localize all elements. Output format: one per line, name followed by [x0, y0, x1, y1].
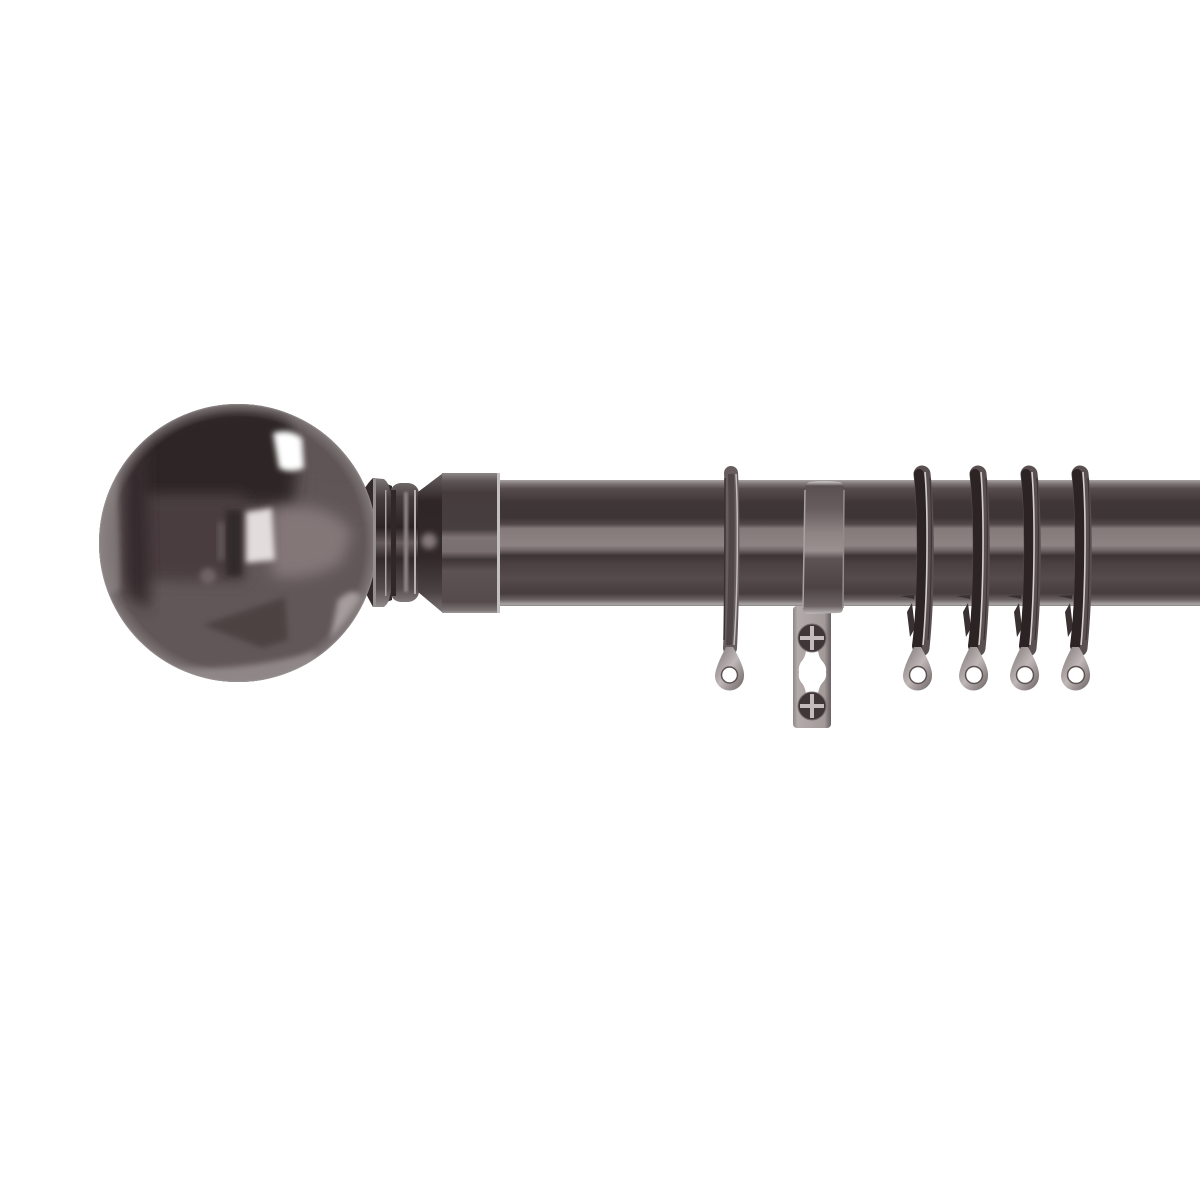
ball finial [99, 404, 373, 682]
ring shadow and hook strand [1058, 595, 1073, 637]
icon: lower screw [798, 692, 826, 720]
finial cone [418, 473, 443, 613]
icon: upper screw [798, 624, 826, 652]
ring band [1028, 474, 1032, 648]
curtain ring 2 [900, 472, 932, 690]
curtain ring 1 [715, 473, 744, 690]
ring band [977, 474, 981, 648]
curtain pole rod [495, 480, 1200, 606]
finial end cap [442, 473, 500, 613]
eyelet [1061, 647, 1090, 690]
eyelet [715, 647, 744, 690]
keyhole slot [799, 651, 826, 694]
eyelet [1010, 647, 1039, 690]
dark left stripe [124, 440, 150, 610]
ring shadow and hook strand [1007, 595, 1022, 637]
mid left band [125, 495, 245, 582]
curtain ring 3 [956, 472, 988, 690]
bottom rim [180, 651, 316, 682]
wall bracket plate [793, 606, 831, 728]
top window highlight [273, 431, 304, 471]
upper right zone [292, 415, 366, 488]
ring shadow and hook strand [956, 595, 971, 637]
dark upper reflection [135, 405, 297, 505]
eyelet [959, 647, 988, 690]
curtain ring 4 [1007, 472, 1039, 690]
mottled reflection spot [200, 568, 216, 584]
ring band [921, 474, 925, 648]
lower floor shadow [203, 597, 288, 648]
eyelet [903, 647, 932, 690]
finial neck collar [373, 478, 390, 607]
curtain ring 5 [1058, 472, 1090, 690]
central window highlight [246, 508, 275, 563]
ring band [1079, 474, 1083, 648]
finial neck shadow [350, 478, 392, 607]
dark strip beside highlight [226, 510, 242, 576]
lower right highlight [330, 592, 362, 640]
finial bead ring [390, 483, 419, 602]
ring shadow and hook strand [900, 595, 915, 637]
bracket clip [803, 481, 844, 614]
light left rim [99, 476, 122, 594]
pale right reflection [272, 506, 352, 577]
